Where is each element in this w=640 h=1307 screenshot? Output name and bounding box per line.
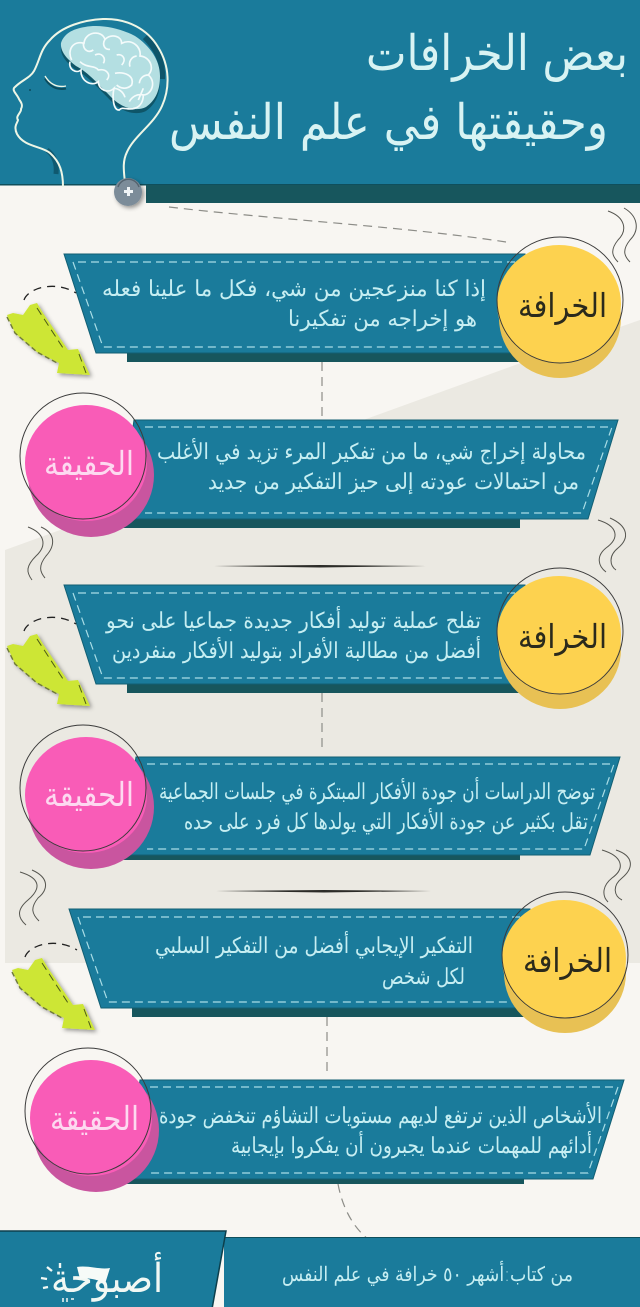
myth text: إذا كنا منزعجين من شي، فكل ما علينا فعله [102,277,486,302]
circle: fact label: الحقيقة [44,775,134,814]
myth text [102,277,486,332]
divider [214,565,426,568]
circle: myth label [502,892,628,1033]
circle: myth label [497,237,623,378]
myth text: هو إخراجه من تفكيرنا [288,307,477,332]
arc connector [24,617,76,631]
circle: fact label: الحقيقة [50,1099,139,1138]
fact text: من احتمالات عودته إلى حيز التفكير من جديد [208,470,579,495]
arrow: green down right [12,958,95,1030]
header banner [0,0,640,206]
dashed connector to footer [338,1184,376,1245]
fact text [157,437,586,495]
panel: fact 1 [20,393,618,537]
dashed connector [321,362,323,420]
divider [216,890,431,892]
logo panel [0,1231,226,1307]
title [169,25,628,151]
panel: fact 3 [25,1048,624,1192]
fact text [159,776,595,835]
myth text [155,930,473,990]
icon: plus bead [114,178,142,206]
icon: head with brain [14,19,168,187]
fact text: محاولة إخراج شي، ما من تفكير المرء تزيد في الأغلب [157,437,586,465]
panel: myth 3 [12,892,628,1033]
myth text: لكل شخص [382,965,465,990]
myth text [105,605,481,664]
arc connector [24,286,76,300]
squiggle decoration [602,850,630,902]
logo wordmark: أصبوحة [51,1251,163,1302]
panel: myth 1 [7,237,623,378]
dashed connector [326,1017,328,1075]
panel: fact 2 [20,725,620,869]
myth text: أفضل من مطالبة الأفراد بتوليد الأفكار منفردين [112,635,481,664]
myth text: تفلح عملية توليد أفكار جديدة جماعيا على نحو [105,605,481,634]
source text: من كتاب:أشهر ٥٠ خرافة في علم النفس [282,1260,573,1286]
circle: fact label [20,725,154,869]
arrow: green down right [7,634,90,706]
squiggle decoration [20,870,46,925]
icon: sun rays and open book [41,1263,110,1302]
myth text: التفكير الإيجابي أفضل من التفكير السلبي [155,930,473,959]
circle: myth label: الخرافة [518,617,607,657]
circle: fact label [20,393,154,537]
circle: myth label: الخرافة [518,286,607,326]
arc connector [25,943,77,957]
dashed connector [321,693,323,751]
fact text [159,1101,602,1159]
squiggle decoration [598,518,626,572]
panel: myth 2 [7,568,623,709]
squiggle decoration [28,527,53,580]
background: beige diagonal band [5,320,640,963]
footer band [0,1231,640,1307]
circle: fact label [25,1048,159,1192]
dashed connector from header [169,207,506,242]
circle: myth label [497,568,623,709]
circle: myth label: الخرافة [523,941,612,981]
circle: fact label: الحقيقة [44,444,134,483]
squiggle decoration [608,208,636,262]
arrow: green down right [7,303,90,375]
